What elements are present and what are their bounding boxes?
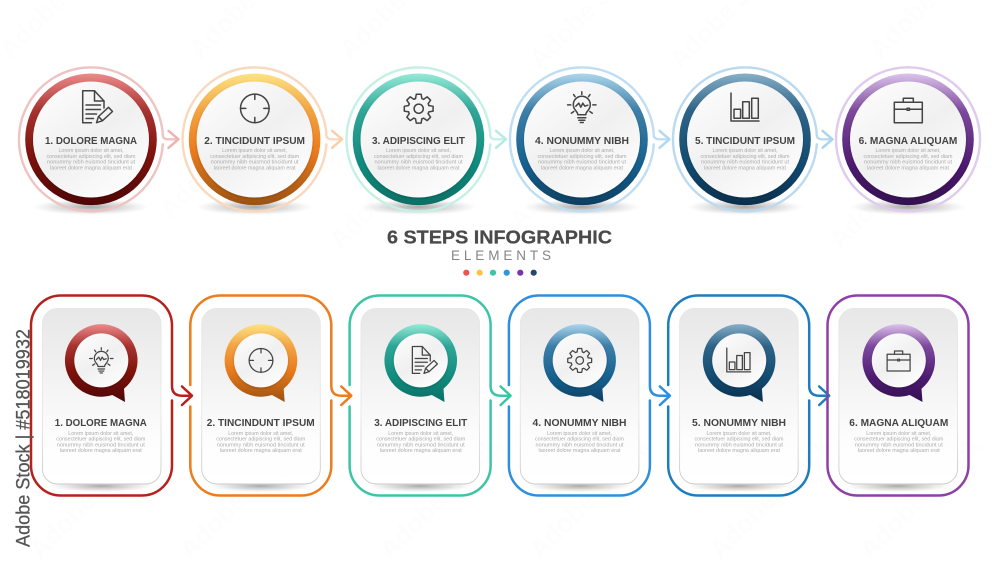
body text 4: Lorem ipsum dolor sit amet, <box>547 431 612 437</box>
body text 4: Lorem ipsum dolor sit amet, <box>550 148 614 154</box>
body text 6: Lorem ipsum dolor sit amet, <box>866 431 931 437</box>
pin 4 <box>543 324 616 402</box>
heading 5: 5. TINCIDUNT IPSUM <box>695 136 795 147</box>
frame 6 <box>828 296 968 496</box>
body text 5: consectetuer adipiscing elit, sed diam <box>695 436 784 442</box>
body text 2: Lorem ipsum dolor sit amet, <box>228 431 293 437</box>
outer ring with arrow 4 <box>510 67 670 211</box>
body text 2: nonummy nibh euismod tincidunt ut <box>217 442 305 448</box>
heading 4: 4. NONUMMY NIBH <box>535 136 629 147</box>
body text 3: Lorem ipsum dolor sit amet, <box>388 431 453 437</box>
panel: bottom step 6 <box>828 296 968 496</box>
body text 3: laoreet dolore magna aliquam erat <box>380 448 462 454</box>
panel: bottom step 5 <box>668 296 829 496</box>
icon: bar chart <box>731 93 759 121</box>
panel: top step 3 <box>346 67 506 215</box>
body text 1: consectetuer adipiscing elit, sed diam <box>46 154 136 160</box>
body text 6: nonummy nibh euismod tincidunt ut <box>864 160 953 166</box>
body text 6: laoreet dolore magna aliquam erat <box>867 165 950 171</box>
body text 3: nonummy nibh euismod tincidunt ut <box>377 442 465 448</box>
panel: bottom step 4 <box>509 296 670 496</box>
frame with arrow 4 <box>509 296 670 496</box>
outer ring with arrow 2 <box>183 67 342 211</box>
body text 4: consectetuer adipiscing elit, sed diam <box>535 436 624 442</box>
body text 6: consectetuer adipiscing elit, sed diam <box>864 154 952 160</box>
icon: target <box>249 349 273 372</box>
stock id side text: Adobe Stock | #518019932 <box>12 329 34 547</box>
body text 1: Lorem ipsum dolor sit amet, <box>68 431 133 437</box>
body text 6 <box>854 431 943 454</box>
heading 6: 6. MAGNA ALIQUAM <box>849 418 948 429</box>
icon: gear <box>404 94 433 123</box>
icon: briefcase <box>894 98 922 123</box>
body text 3: nonummy nibh euismod tincidunt ut <box>374 160 463 166</box>
body text 5: laoreet dolore magna aliquam erat <box>698 448 781 454</box>
heading 2: 2. TINCINDUNT IPSUM <box>207 418 315 429</box>
body text 1: consectetuer adipiscing elit, sed diam <box>56 436 145 442</box>
body text 5 <box>700 148 790 171</box>
pin 1 <box>65 324 138 402</box>
heading 6: 6. MAGNA ALIQUAM <box>859 136 957 147</box>
heading 3: 3. ADIPISCING ELIT <box>372 136 465 147</box>
outer ring with arrow 5 <box>673 67 832 211</box>
body text 1: nonummy nibh euismod tincidunt ut <box>57 442 145 448</box>
frame with arrow 2 <box>190 296 351 496</box>
body text 4: nonummy nibh euismod tincidunt ut <box>535 442 624 448</box>
body text 6: nonummy nibh euismod tincidunt ut <box>855 442 943 448</box>
heading 3: 3. ADIPISCING ELIT <box>374 418 467 429</box>
body text 2: laoreet dolore magna aliquam erat <box>214 165 296 171</box>
body text 2: consectetuer adipiscing elit, sed diam <box>216 436 305 442</box>
body text 5: Lorem ipsum dolor sit amet, <box>712 148 778 154</box>
body text 3: consectetuer adipiscing elit, sed diam <box>374 154 463 160</box>
outer ring with arrow 1 <box>19 67 178 211</box>
body text 1 <box>46 148 136 171</box>
body text 5: nonummy nibh euismod tincidunt ut <box>695 442 784 448</box>
heading 4: 4. NONUMMY NIBH <box>532 418 627 429</box>
body text 6 <box>864 148 953 171</box>
pin 6 <box>862 324 935 402</box>
body text 3: laoreet dolore magna aliquam erat <box>378 165 460 171</box>
outer ring with arrow 3 <box>346 67 506 211</box>
body text 2 <box>216 431 305 454</box>
body text 6: laoreet dolore magna aliquam erat <box>858 448 940 454</box>
icon: bar chart <box>727 348 751 372</box>
icon: briefcase <box>887 351 910 371</box>
body text 1: Lorem ipsum dolor sit amet, <box>58 148 124 154</box>
pin 5 <box>703 324 775 402</box>
pin 3 <box>384 324 457 402</box>
panel: bottom step 2 <box>190 296 351 496</box>
body text 5: nonummy nibh euismod tincidunt ut <box>701 160 790 166</box>
body text 3: Lorem ipsum dolor sit amet, <box>386 148 451 154</box>
body text 4: laoreet dolore magna aliquam erat <box>538 448 621 454</box>
body text 2: consectetuer adipiscing elit, sed diam <box>210 154 299 160</box>
panel: bottom step 1 <box>31 296 192 496</box>
body text 5 <box>694 431 784 454</box>
body text 1: laoreet dolore magna aliquam erat <box>60 448 142 454</box>
icon: light bulb <box>568 92 596 122</box>
panel: top step 4 <box>510 67 670 215</box>
colour dots <box>463 270 537 276</box>
body text 4: consectetuer adipiscing elit, sed diam <box>538 154 626 160</box>
outer ring 6 <box>836 67 980 211</box>
body text 6: consectetuer adipiscing elit, sed diam <box>854 436 943 442</box>
heading 1: 1. DOLORE MAGNA <box>45 136 137 147</box>
panel: top step 5 <box>673 67 832 215</box>
icon: light bulb <box>90 348 113 373</box>
body text 2: Lorem ipsum dolor sit amet, <box>222 148 287 154</box>
panel: top step 6 <box>836 67 980 215</box>
frame with arrow 1 <box>31 296 192 496</box>
subtitle: ELEMENTS <box>451 248 551 263</box>
body text 4 <box>535 431 624 454</box>
body text 5: consectetuer adipiscing elit, sed diam <box>700 154 790 160</box>
heading 2: 2. TINCIDUNT IPSUM <box>204 136 305 147</box>
body text 3 <box>376 431 465 454</box>
body text 4: nonummy nibh euismod tincidunt ut <box>538 160 627 166</box>
body text 2: laoreet dolore magna aliquam erat <box>220 448 302 454</box>
icon: gear <box>568 348 592 372</box>
title: 6 STEPS INFOGRAPHIC <box>387 226 612 248</box>
body text 1 <box>56 431 145 454</box>
frame with arrow 5 <box>668 296 829 496</box>
body text 1: nonummy nibh euismod tincidunt ut <box>47 160 136 166</box>
frame with arrow 3 <box>350 296 511 496</box>
heading 1: 1. DOLORE MAGNA <box>55 418 147 429</box>
panel: top step 2 <box>183 67 342 215</box>
body text 4: laoreet dolore magna aliquam erat <box>541 165 624 171</box>
body text 5: laoreet dolore magna aliquam erat <box>704 165 787 171</box>
body text 4 <box>538 148 627 171</box>
body text 5: Lorem ipsum dolor sit amet, <box>707 431 772 437</box>
body text 2: nonummy nibh euismod tincidunt ut <box>211 160 299 166</box>
heading 5: 5. NONUMMY NIBH <box>692 418 786 429</box>
body text 1: laoreet dolore magna aliquam erat <box>50 165 133 171</box>
body text 2 <box>210 148 299 171</box>
icon: target <box>240 94 269 123</box>
body text 6: Lorem ipsum dolor sit amet, <box>876 148 940 154</box>
body text 3 <box>374 148 463 171</box>
icon: document <box>412 347 437 373</box>
panel: bottom step 3 <box>350 296 511 496</box>
body text 3: consectetuer adipiscing elit, sed diam <box>376 436 465 442</box>
panel: top step 1 <box>19 67 178 215</box>
pin 2 <box>225 324 297 402</box>
icon: document <box>83 91 112 123</box>
